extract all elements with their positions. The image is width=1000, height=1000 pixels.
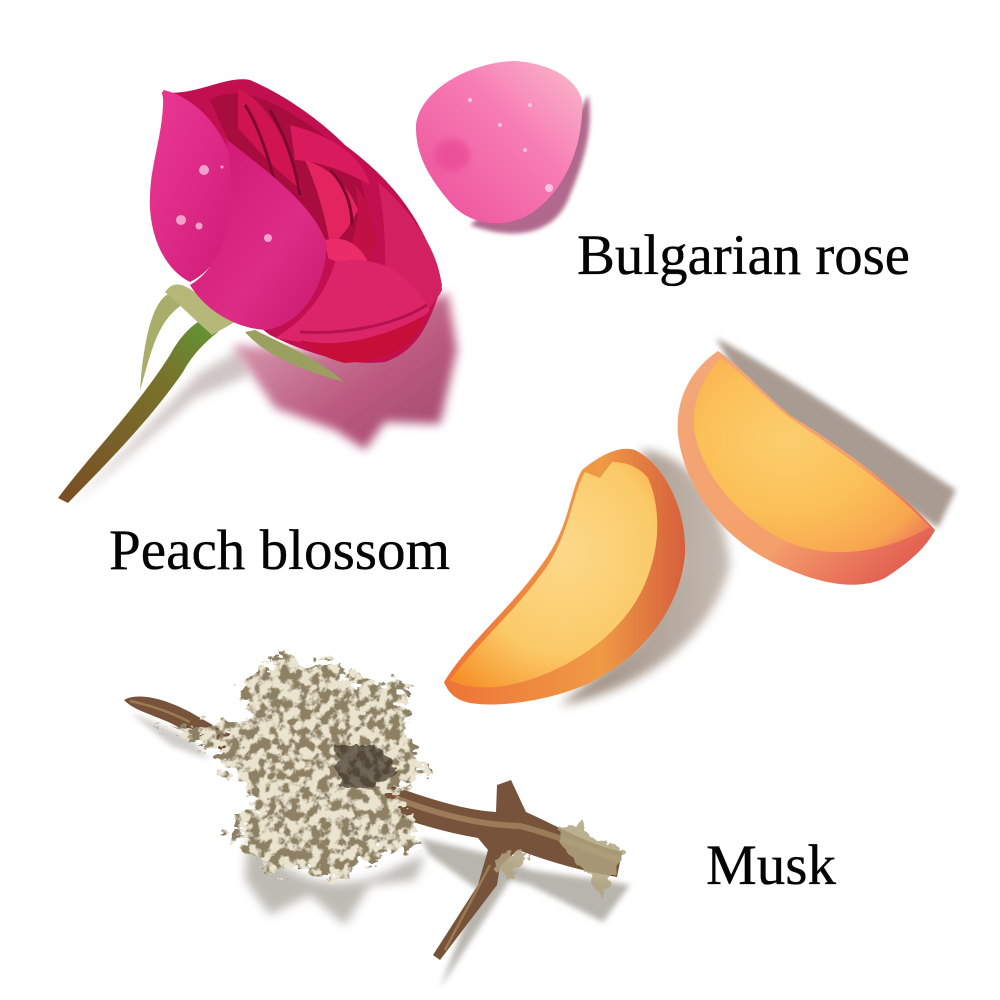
lichen clump	[165, 648, 428, 880]
rose water droplets	[176, 165, 272, 242]
label: Peach blossom: Peach blossom	[109, 519, 450, 582]
rose stem	[58, 318, 218, 503]
illustration: peach slices	[444, 338, 956, 705]
rose stem shadow	[72, 350, 250, 505]
lichen dark core	[335, 745, 398, 790]
peach slice right	[678, 351, 935, 585]
petal crease	[434, 139, 470, 171]
lichen shadow	[245, 835, 425, 925]
illustration: musk twig with lichen	[124, 648, 630, 988]
lichen tuft near twig end	[495, 820, 625, 895]
label: Bulgarian rose: Bulgarian rose	[577, 224, 910, 287]
twig branches	[124, 696, 622, 960]
illustration: rose petal	[416, 61, 590, 233]
label: Musk: Musk	[706, 834, 836, 897]
illustration: rose flower with stem	[58, 79, 457, 505]
petal droplets	[468, 98, 553, 192]
rose front petals	[150, 90, 236, 282]
peach shadow right slice	[716, 338, 956, 528]
petal body	[416, 61, 582, 223]
rose centre folds	[238, 88, 375, 268]
twig shadow	[420, 838, 630, 988]
rose sepals	[140, 292, 185, 390]
rose front lower petal	[275, 260, 430, 344]
peach shadow left slice	[560, 450, 730, 705]
peach slice left	[444, 449, 685, 704]
petal shadow	[470, 95, 590, 233]
rose cast shadow	[232, 293, 457, 450]
left twig shadow	[130, 712, 210, 760]
rose back petals	[162, 79, 442, 363]
